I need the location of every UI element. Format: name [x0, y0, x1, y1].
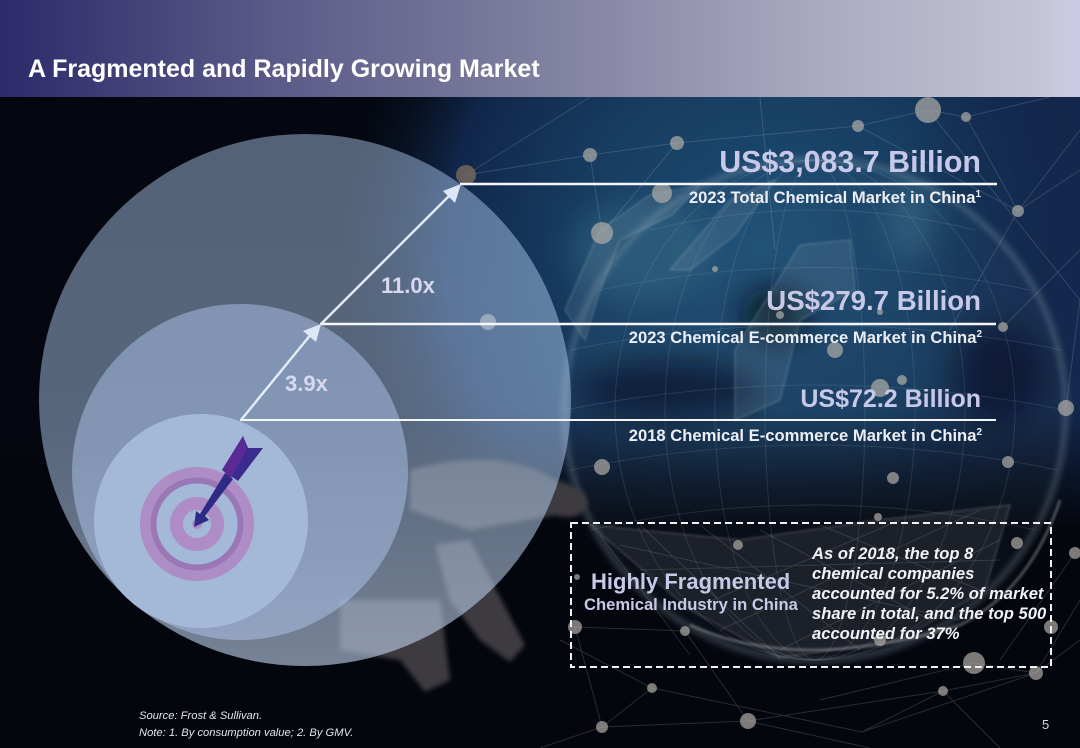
source note: [139, 710, 353, 739]
icon: target with arrow: [147, 436, 263, 574]
title: A Fragmented and Rapidly Growing Market: [28, 55, 540, 83]
callout text: As of 2018, the top 8: [812, 544, 973, 563]
callout text: accounted for 37%: [812, 624, 960, 643]
value: 2023 e-commerce: US$279.7 Billion: [766, 285, 981, 316]
callout text: [812, 544, 1046, 643]
callout subheading: Chemical Industry in China: [584, 595, 798, 614]
callout text: accounted for 5.2% of market: [812, 584, 1043, 603]
page number: 5: [1042, 717, 1049, 732]
multiplier 11.0x: 11.0x: [381, 273, 435, 298]
label: 2023 e-commerce: 2023 Chemical E-commerce Market in China2: [629, 328, 982, 347]
source note: Source: Frost & Sullivan.: [139, 710, 262, 722]
callout: fragmented industry: [570, 522, 1052, 668]
leader lines and growth arrows: [240, 184, 997, 420]
circle: 2018 e-commerce: [94, 414, 308, 628]
header bar: [0, 0, 1080, 97]
callout text: share in total, and the top 500: [812, 604, 1046, 623]
label: 2018 e-commerce: 2018 Chemical E-commerce Market in China2: [629, 426, 982, 445]
label: total market: 2023 Total Chemical Market in China1: [689, 188, 981, 207]
circle: total market: [39, 134, 571, 666]
value: 2018 e-commerce: US$72.2 Billion: [800, 385, 981, 413]
value: total market: US$3,083.7 Billion: [719, 145, 981, 179]
multiplier 3.9x: 3.9x: [285, 371, 328, 396]
callout heading: Highly Fragmented: [591, 569, 790, 594]
callout text: chemical companies: [812, 564, 974, 583]
source note: Note: 1. By consumption value; 2. By GMV.: [139, 727, 353, 739]
circle: 2023 e-commerce: [72, 304, 408, 640]
